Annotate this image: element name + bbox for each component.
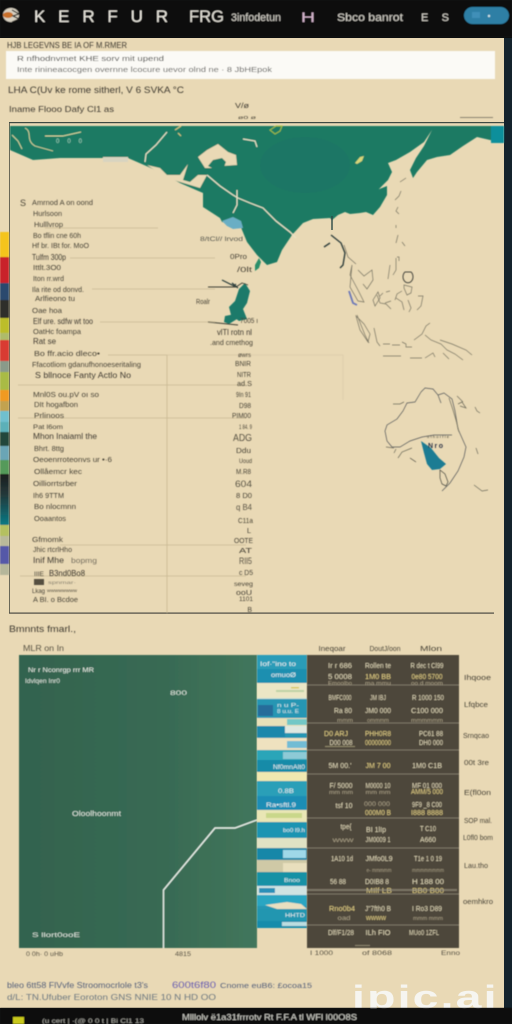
map: river lines	[12, 126, 296, 238]
panel: left list of names: Bo ffr.acio dleco•	[34, 349, 100, 358]
table right-side labels	[463, 675, 493, 906]
table rows: T C10	[420, 826, 436, 833]
table rows: oad	[338, 916, 350, 922]
panel: left list of names: Amrnod A on oond	[32, 198, 93, 207]
map: blue lake	[421, 441, 446, 470]
panel: right value column: M.R8	[236, 467, 251, 476]
watermark: ipic.ai	[352, 980, 499, 1015]
panel: right value column	[196, 236, 258, 614]
chart label top: Nr r Nconrgp rrr MR	[28, 667, 94, 674]
panel: teal strip: 8 u.u. E	[277, 709, 299, 715]
header bar	[0, 0, 512, 37]
table rows: DH0 000	[419, 740, 443, 747]
footnote text: Cnome euB6: £ocoa15	[220, 981, 312, 990]
table rows: tsf 10	[336, 803, 353, 810]
map scale sublabel: ø0 ø	[238, 115, 256, 120]
colour strip legend	[0, 232, 9, 575]
panel: left list of names: Bo tflin cne 60h	[33, 231, 81, 240]
table rows: Dlf/F1/28	[328, 930, 354, 937]
panel: right value column: L	[247, 526, 251, 535]
table rows: ma mmu	[365, 681, 391, 687]
table rows: AMM/5 000	[411, 789, 443, 796]
map: darker tint	[260, 137, 350, 193]
panel: right value column: q B4	[236, 502, 252, 512]
panel: left list of names: Hurlsoon	[33, 209, 62, 218]
table rows: MF 01 000	[412, 783, 442, 790]
table right-side labels: 00t 3re	[464, 760, 489, 767]
table rows: 0e80 5700	[412, 674, 443, 681]
chart centre label: Oloolhoonmt	[72, 811, 121, 818]
panel: left list of names: Ila rite od donvd.	[32, 285, 84, 294]
header icons: E S	[421, 12, 449, 24]
table rows: 1A10 1d	[331, 856, 353, 863]
panel: right value column: ADG	[233, 433, 252, 444]
panel: map frame	[9, 122, 504, 614]
header subtitle: FRG	[189, 7, 224, 26]
panel: right value column: 8 D0	[236, 491, 252, 500]
table column headers: Ineqoar	[318, 646, 346, 653]
panel: left list of names: Tulfm 300p	[32, 253, 66, 262]
panel: right value column: Roalr	[196, 297, 210, 306]
table rows: ommmm	[367, 718, 389, 724]
table rows: I Ro3 D89	[412, 906, 442, 913]
chart bottom label: S llort0ooE	[32, 933, 80, 939]
panel: teal strip: HHTD	[285, 913, 305, 919]
footer centre text: Mlllolv ë1a31frrrotv Rt F.F.A tl WFl l00O8S	[182, 1013, 357, 1022]
table rows: wwww	[365, 915, 387, 922]
header menu item: Sbco banrot	[337, 12, 403, 24]
table rows: PC61 88	[419, 731, 443, 738]
panel: teal strip: Bnoo	[284, 878, 300, 884]
table rows: Rollen te	[365, 663, 391, 670]
panel: right value column: ooU	[236, 588, 252, 597]
white callout	[6, 51, 495, 79]
chart axis labels	[26, 951, 191, 958]
panel: left list of names: OatHc foampa	[33, 327, 82, 336]
table rows: Rno0b4	[329, 906, 355, 913]
table rows: T1e 1 0 19	[414, 856, 442, 863]
header icon text: H	[301, 9, 315, 25]
panel: right value column: Uoud	[239, 458, 252, 465]
table lines	[18, 228, 343, 613]
panel: right value column: 604	[235, 479, 252, 489]
panel: left list of names: bopmg	[71, 558, 97, 565]
panel: right value column: D98	[239, 401, 251, 410]
table rows: JM 7 00	[366, 763, 391, 770]
panel: left list of names: Prlinoos	[34, 411, 64, 420]
map subheading: Iname Flooo Dafy Cl1 as	[9, 104, 114, 114]
panel: left list of names: Ollåemcr kec	[34, 467, 82, 476]
table rows	[324, 663, 444, 937]
panel: teal strip: Iof·"ino to	[260, 661, 296, 668]
table rows: 1M0 BB	[365, 674, 391, 681]
chart trend line	[164, 820, 257, 948]
panel: left list of names: Ffacotliom gdanufhonoeseritaling	[32, 360, 141, 369]
map: cream bay	[147, 164, 207, 188]
chart label second: Idvlqen Inr0	[25, 679, 61, 685]
panel: right value column: ad.S	[237, 379, 252, 388]
panel: left list of names: Elf ure. sdfw wt too	[33, 317, 93, 326]
table rows: D0 ARJ	[324, 731, 348, 738]
table right-side labels: Lfqbce	[464, 702, 488, 709]
panel: teal strip: n u P-	[277, 703, 299, 709]
map: green pond	[208, 158, 226, 169]
table rows: D00 008	[330, 740, 353, 747]
right edge dark band	[504, 38, 512, 1008]
panel: left list of names: Hulllvrop	[34, 220, 63, 229]
panel: left list of names: Arlfieono tu	[35, 294, 75, 303]
intro block	[6, 41, 495, 120]
panel: left list of names: Jhic rtcrlHho	[33, 545, 72, 554]
table rows: Emoolbo	[328, 681, 352, 687]
panel: right value column: vlTl rotn nl	[217, 328, 252, 337]
table rows: oo d moom	[411, 681, 443, 687]
table rows: Ra 80	[334, 708, 352, 715]
panel: right value column: B	[247, 607, 252, 614]
table rows: M0000 10	[366, 783, 391, 790]
panel: left list of names: Mnl0S ou.pV oı so	[33, 390, 99, 399]
map: top-right teal corner	[491, 126, 504, 143]
table bottom labels: of 8068	[362, 950, 393, 957]
table bottom labels: Enno	[441, 950, 460, 957]
panel: left list of names: Bo nlocmnn	[34, 502, 76, 511]
panel: teal strip: omuoØ	[271, 672, 296, 679]
table rows: JM0009 1	[366, 837, 391, 844]
footnote text: 600t6f80	[172, 980, 216, 990]
panel: left list of names: Oeoenrroteonvs ur •·6	[33, 455, 112, 464]
table rows: ILh FIO	[366, 930, 391, 937]
panel: right value column: /0lt	[237, 265, 253, 274]
table rows: PHH0R8	[365, 731, 391, 738]
panel: right value column: 1101	[239, 597, 254, 603]
footnote text	[7, 980, 312, 1002]
panel: teal strip: Ra•sftl.9	[266, 802, 296, 809]
panel: dark data table	[307, 646, 459, 948]
table rows: 56 88	[330, 879, 346, 886]
table rows: R 1000 150	[412, 695, 444, 702]
table right-side labels: oemhkro	[463, 899, 493, 906]
panel: right value column: RIl5	[239, 556, 252, 566]
panel: right value column: AT	[239, 546, 253, 555]
table rows: mmmmmm	[411, 718, 443, 724]
table rows: 1M0 C1B	[412, 763, 442, 770]
map: Australia labels: Nro	[428, 443, 443, 450]
panel: left list of names: Rat se	[33, 337, 57, 346]
map: coast labels: 0 0 0	[56, 139, 83, 145]
panel: right value column: c D5	[239, 568, 253, 577]
map: Australia outline	[385, 388, 488, 491]
footer logo	[13, 1017, 24, 1024]
map: cream upper lake	[198, 144, 237, 168]
panel: right value column: OOTE	[234, 536, 253, 545]
list heading marker: S	[20, 198, 26, 208]
map: vertical strait	[331, 216, 333, 230]
panel: right value column: 8/tCl// lrvod	[200, 236, 243, 243]
panel: green chart	[19, 655, 257, 948]
panel: right value column: C11a	[238, 516, 254, 525]
table rows: JM IBJ	[370, 695, 386, 702]
table rows: BB0 B00	[412, 888, 444, 895]
panel: right value column: 1 84. 9	[239, 425, 252, 431]
table bottom labels	[310, 950, 460, 957]
panel: teal strip: Nf0mnAIt0	[273, 764, 305, 771]
table rows: JM0 000	[365, 708, 391, 715]
brand title: KERFUR	[34, 7, 168, 26]
panel: left list of names: Ih6 9TTM	[33, 491, 64, 500]
header menu item: 3infodetun	[231, 12, 281, 24]
table rows: C100 000	[411, 708, 443, 715]
panel: left list of names: Bhrt. 8ttg	[34, 444, 64, 453]
table rows: mm mm	[329, 790, 353, 796]
panel: left list of names: Inif Mhe	[33, 556, 65, 565]
footer bar	[0, 1008, 512, 1024]
icon: logo	[3, 8, 19, 22]
map: blue lake inlet	[222, 217, 243, 229]
table rows: R dec t Cl99	[410, 663, 444, 670]
chart axis labels: 0 0h· 0 uHb	[26, 951, 63, 958]
map: green landmass	[10, 126, 504, 265]
panel: left list of names: Gfmomk	[32, 535, 63, 544]
table right-side labels: Lau.tho	[464, 863, 488, 870]
table rows: 9F9 _8 C00	[412, 802, 442, 809]
table right-side labels: L0fl0 bom	[463, 835, 493, 842]
panel: left list of names: Oilliorrtsrber	[33, 479, 78, 488]
panel: right value column: 0Pro	[230, 252, 247, 261]
table rows: mm mm	[366, 790, 390, 796]
table right-side labels: E(fl0on	[464, 790, 491, 797]
panel: left list of names: Mhon Inaiaml the	[33, 432, 98, 441]
table rows: BMFC000	[328, 695, 352, 702]
table rows: 000 000	[364, 802, 391, 808]
panel: right value column: 7005 ı	[240, 316, 258, 325]
footnote text: d/L: TN.Ufuber Eoroton GNS NNIE 10 N HD OO	[7, 993, 216, 1002]
table rows: MUo0 1ZFL	[409, 930, 439, 937]
table column headers	[318, 646, 442, 653]
smeared highlight bands	[307, 889, 457, 891]
panel: right value column: PIM00	[232, 411, 251, 420]
map: coloured accents	[270, 126, 282, 134]
table rows: mmmmmmmm	[412, 868, 444, 874]
panel: right value column: øwrs	[238, 353, 251, 359]
table rows: A660	[420, 837, 436, 844]
table rows: H 188 00	[412, 879, 444, 886]
intro kicker: HJB LEGEVNS BE IA OF M.RMER	[7, 41, 127, 50]
panel: teal strip: 0.8B	[278, 789, 294, 795]
panel: right value column: Ddu	[236, 446, 251, 455]
table right-side labels: Ihqooe	[464, 675, 491, 682]
panel: left list of names: Iton rr.wrd	[33, 274, 64, 283]
panel: left list of names: IIIE	[34, 572, 44, 578]
table rows: BI 1lIp	[366, 827, 386, 834]
header button	[464, 7, 509, 24]
panel: left list of names: Hf br. IBt for. MoO	[32, 241, 89, 250]
table rows: D0IB8 8	[365, 879, 389, 886]
panel: left list of names: Oae hoa	[32, 306, 63, 315]
panel: right value column: BNIR	[235, 359, 252, 368]
table rows: mmm	[337, 718, 353, 724]
map: Southeast Asia islands	[324, 178, 472, 360]
table bottom labels: I 1000	[310, 950, 333, 957]
panel: left list of names: wwwwwwww	[47, 588, 78, 593]
table rows: JMfo0L9	[366, 856, 393, 863]
table rows: tpe{	[340, 824, 352, 831]
chart value: 800	[170, 690, 188, 697]
panel: left list of names: Ooaantos	[34, 514, 66, 523]
table column headers: DoutJ/oon	[370, 646, 401, 653]
panel: left list of names: Lkag	[32, 588, 45, 595]
panel: left list of names: B3nd0Bo8	[49, 569, 86, 578]
panel: left list of names	[20, 198, 141, 604]
map: lagoon	[208, 258, 261, 325]
lower section heading: Bmnnts fmarl.,	[9, 624, 76, 634]
lower chart subheading: MLR on In	[23, 644, 64, 653]
table column headers: Mlon	[420, 646, 442, 653]
panel: left list of names: A BI. o Bcdoe	[33, 595, 78, 604]
table rows: 00000000	[365, 740, 391, 747]
map heading: LHA C(Uv ke rome sitherl, V 6 SVKA °C	[8, 85, 185, 95]
table rows: Ir r 686	[328, 663, 352, 670]
table rows: F/ 5000	[330, 783, 353, 790]
map scale label: V/ø	[235, 103, 250, 110]
panel: left list of names: DIt hogafbon	[34, 400, 78, 409]
chart axis labels: 4815	[175, 951, 191, 958]
panel: left list of names: spnmar·	[48, 580, 76, 585]
panel: right value column: .and cmethog	[210, 338, 253, 347]
panel: right value column: seveg	[234, 582, 253, 588]
panel: teal strip: bo0 l9.h	[283, 828, 305, 834]
table rows: mmm mmm	[413, 916, 443, 922]
map: Australia outline: uthorfle	[427, 434, 450, 439]
panel: left list of names: S bllnoce Fanty Actlo No	[35, 371, 132, 380]
map: pale label patch	[103, 157, 128, 162]
white callout: R nfhodnvmet KHE sorv mit upend	[17, 54, 164, 63]
panel: right value column: NITR	[237, 370, 251, 379]
table right-side labels: Srnqcao	[463, 733, 489, 740]
table right-side labels: SOP mal.	[464, 818, 492, 825]
table rows: www	[331, 838, 355, 844]
white callout: Inte rinineacocgen overnne lcocure uevor olnd ne · 8 JbHEpok	[17, 67, 273, 74]
table rows: 5M 00.'	[328, 763, 352, 770]
table rows: I888 8888	[411, 810, 443, 817]
table rows: MIlf LB	[366, 888, 392, 895]
footnote text: bleo 6tt58 FlVvfe Stroomocrlole t3's	[7, 981, 148, 990]
panel: right value column: 9In 91	[236, 390, 251, 399]
table rows: e- mmmmm	[366, 868, 392, 874]
panel: teal strip	[257, 655, 307, 928]
panel: left list of names: Pat l6om	[33, 424, 63, 431]
panel: left list of names: Ittlt.3O0	[33, 263, 61, 272]
table rows: 000M0 B	[365, 810, 391, 817]
table rows: 5 0008	[328, 674, 352, 681]
table rows: J"7fth0 B	[365, 906, 391, 913]
